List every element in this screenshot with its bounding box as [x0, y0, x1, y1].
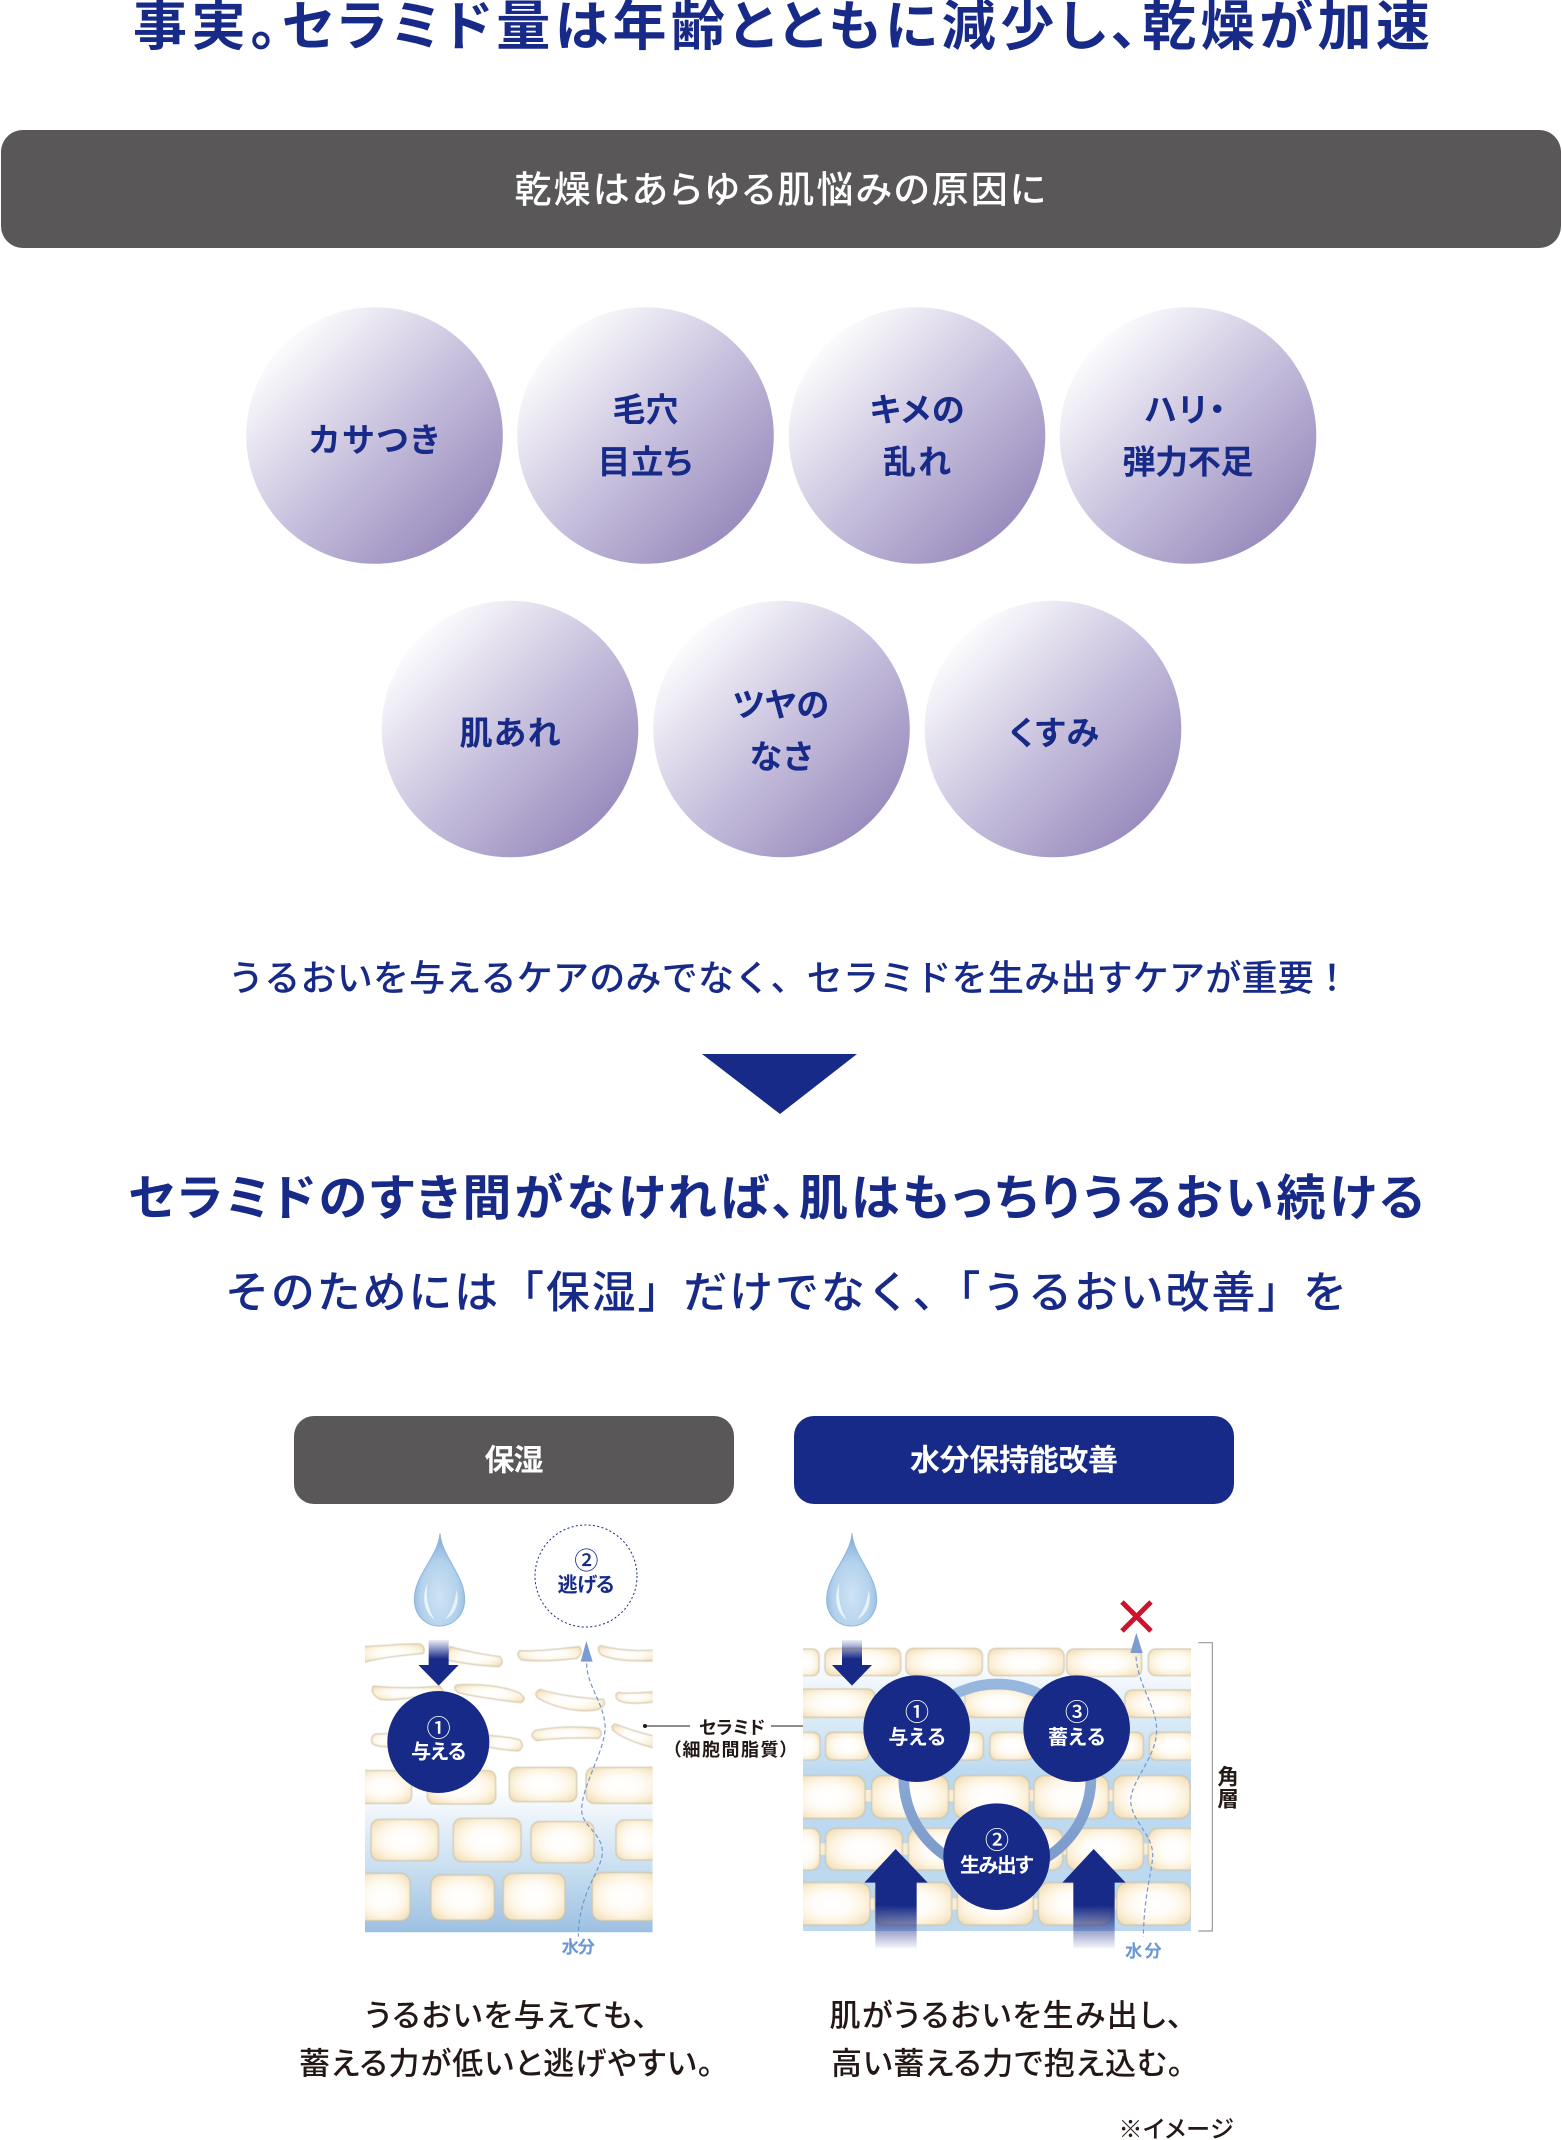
text: care message: うるおいを与えるケアのみでなく、セラミドを生み出すケアが重要！ — [228, 958, 1350, 998]
diagram: water retention improvement — [793, 1533, 1239, 1961]
label: 水分: 水分 — [562, 1937, 596, 1957]
bracket: stratum corneum — [1198, 1643, 1239, 1931]
bubble: ハリ・弾力不足: ハリ・ — [1144, 392, 1226, 428]
skin cross-section: dense ceramide — [793, 1647, 1199, 1931]
bubble: キメの乱れ: キメの — [870, 392, 964, 428]
caption: moisturizing: うるおいを与えても、 — [365, 1998, 648, 2034]
bubble: 毛穴目立ち — [517, 307, 774, 564]
arrow: downward triangle — [702, 1054, 857, 1114]
bracket: stratum corneum: 角 — [1217, 1765, 1239, 1789]
label: 保湿 — [294, 1416, 734, 1504]
badge: ③ 蓄える: ③ — [1065, 1699, 1089, 1726]
bubble: くすみ — [925, 601, 1181, 857]
badge: ① 与える — [387, 1691, 489, 1793]
bubble: ツヤのなさ: ツヤの — [733, 686, 829, 724]
caption: water retention — [830, 1998, 1183, 2082]
caption: water retention: 高い蓄える力で抱え込む。 — [831, 2046, 1183, 2082]
arrow: water flowing in — [832, 1640, 872, 1686]
bracket: stratum corneum: 層 — [1217, 1787, 1239, 1811]
bubble: カサつき — [246, 307, 503, 564]
bubble: ハリ・弾力不足 — [1060, 307, 1316, 564]
badge: ② 生み出す: ② — [985, 1827, 1009, 1854]
arrow: water escaping — [578, 1641, 605, 1937]
skin cross-section: sparse ceramide — [357, 1640, 659, 1932]
heading: ceramide gaps: セラミドのすき間がなければ、肌はもっちりうるおい続ける — [128, 1172, 1424, 1226]
bubble: キメの乱れ: 乱れ — [883, 444, 951, 480]
label: 水分保持能改善 — [794, 1416, 1234, 1504]
callout: ceramide label: セラミド — [699, 1718, 765, 1738]
icon: water drop — [414, 1533, 465, 1626]
ring: three-step cycle — [904, 1684, 1091, 1871]
subheading: そのためには「保湿」だけでなく、「うるおい改善」を — [225, 1268, 1347, 1318]
bubble: 肌あれ — [382, 601, 638, 857]
label: 水分: 水分 — [1125, 1941, 1162, 1961]
badge: ① 与える: ① — [905, 1699, 929, 1726]
label: 水分保持能改善: 水分保持能改善 — [910, 1444, 1118, 1478]
bubble: カサつき: カサつき — [309, 422, 439, 458]
caption: moisturizing — [299, 1998, 713, 2082]
arrow: water flowing in — [418, 1640, 459, 1686]
arrow: left production arrow — [864, 1849, 928, 1948]
icon: water drop — [827, 1533, 877, 1626]
bubble: ツヤのなさ — [653, 601, 910, 857]
badge: ② 逃げる: 逃げる — [558, 1573, 614, 1596]
bubble: 毛穴目立ち: 毛穴 — [612, 392, 678, 428]
bubble: キメの乱れ — [789, 307, 1045, 564]
callout: ceramide label: （細胞間脂質） — [672, 1740, 789, 1760]
caption: water retention: 肌がうるおいを生み出し、 — [830, 1998, 1182, 2034]
panel: skin trouble bubbles — [246, 307, 1316, 857]
banner: dryness causes skin troubles — [1, 130, 1561, 248]
callout: ceramide label — [643, 1718, 816, 1760]
badge: ① 与える: ① — [427, 1715, 451, 1742]
bubble: ハリ・弾力不足: 弾力不足 — [1122, 444, 1254, 480]
badge: ③ 蓄える: 蓄える — [1048, 1726, 1105, 1749]
badge: ③ 蓄える — [1023, 1675, 1130, 1782]
label: 保湿: 保湿 — [484, 1444, 544, 1478]
bubble: 毛穴目立ち: 目立ち — [598, 444, 692, 480]
icon: red cross — [1122, 1602, 1151, 1631]
badge: ① 与える — [863, 1675, 970, 1782]
bubble: くすみ: くすみ — [1009, 714, 1099, 752]
bubble: ツヤのなさ: なさ — [750, 738, 812, 776]
arrow: water retained — [1130, 1633, 1157, 1937]
badge: ① 与える: 与える — [888, 1726, 946, 1749]
diagram: moisturizing only — [357, 1525, 659, 1957]
banner: dryness causes skin troubles: 乾燥はあらゆる肌悩みの原因に — [514, 170, 1046, 210]
arrow: right production arrow — [1062, 1849, 1126, 1948]
caption: moisturizing: 蓄える力が低いと逃げやすい。 — [299, 2046, 713, 2082]
badge: ② 生み出す: 生み出す — [960, 1854, 1033, 1877]
bubble: 肌あれ: 肌あれ — [460, 714, 561, 752]
badge: ② 生み出す — [943, 1803, 1050, 1910]
badge: ② 逃げる — [535, 1525, 637, 1627]
badge: ① 与える: 与える — [411, 1741, 466, 1764]
badge: ② 逃げる: ② — [574, 1548, 598, 1575]
